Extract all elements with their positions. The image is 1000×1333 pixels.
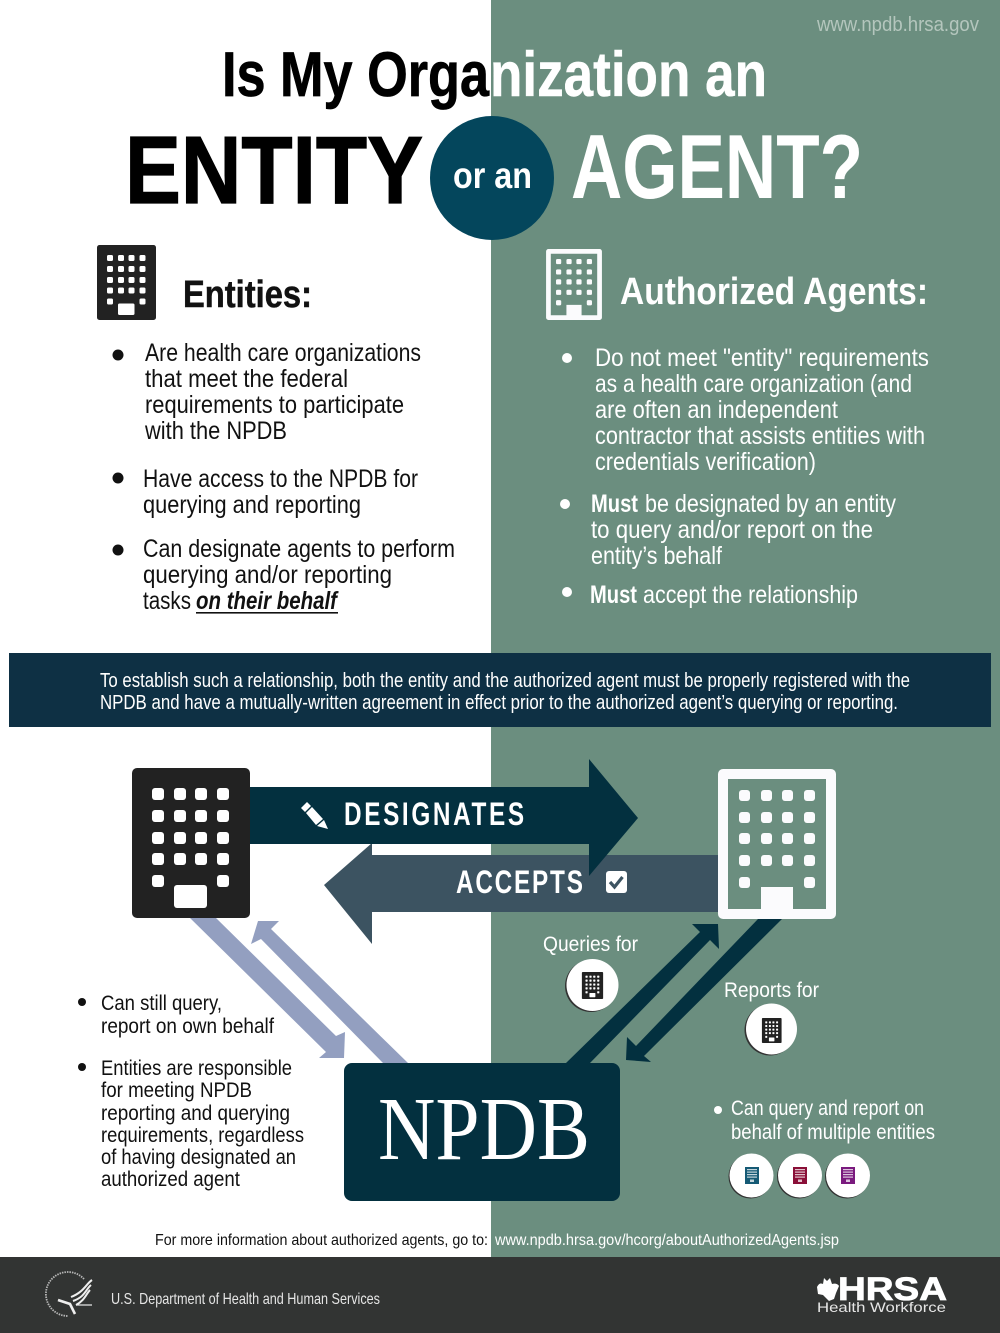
title: [222, 40, 767, 110]
arrow: NPDB to entity: [251, 921, 408, 1063]
arrow: agent reports to NPDB: [626, 919, 782, 1062]
logo: HRSA: [817, 1271, 947, 1315]
link: authorized agents url: www.npdb.hrsa.gov/hcorg/aboutAuthorizedAgents.jsp: [494, 1232, 839, 1249]
arrow: agent queries NPDB: [566, 924, 719, 1063]
panel: entities bullet list: querying and reporting: [143, 491, 361, 519]
panel: entities bullet list: with the NPDB: [144, 417, 287, 445]
arrow: accepts: ACCEPTS: [456, 865, 583, 901]
panel: agents bullet list: contractor that assists entities with: [595, 422, 925, 450]
banner: relationship note: [9, 653, 991, 727]
text: entity notes: requirements, regardless: [101, 1124, 304, 1147]
arrow: entity to NPDB: [190, 918, 345, 1058]
text: entity notes: for meeting NPDB: [101, 1079, 252, 1102]
badge: or an: or an: [453, 155, 532, 196]
label: queries for: Queries for: [543, 933, 638, 956]
panel: agents bullet list: Must: [591, 490, 639, 518]
text: agent note: [714, 1097, 935, 1144]
panel: agents bullet list: Do not meet "entity" requirements: [595, 344, 929, 372]
panel: entities bullet list: tasks: [143, 587, 191, 615]
icon: checkbox: [606, 871, 627, 893]
footer bar: [0, 1257, 1000, 1333]
panel: agents bullet list: be designated by an entity: [645, 490, 896, 518]
panel: entities bullet list: requirements to participate: [145, 391, 404, 419]
text: entity notes: of having designated an: [101, 1146, 296, 1169]
icon: queries entity circle: [565, 959, 618, 1012]
title: Is My Orga: [222, 40, 490, 110]
icon: pencil: [301, 802, 328, 829]
arrow: accepts: [324, 843, 718, 944]
text: entity notes: authorized agent: [101, 1168, 240, 1191]
icon: entity building: [97, 245, 156, 320]
panel: entities bullet list: on their behalf: [196, 587, 339, 615]
heading: entity: ENTITY: [125, 117, 423, 224]
panel: entities bullet list: Have access to the NPDB for: [143, 465, 418, 493]
heading: Authorized Agents: Authorized Agents:: [620, 271, 928, 313]
panel: entities bullet list: [112, 339, 455, 615]
box: NPDB: NPDB: [378, 1080, 590, 1179]
panel: agents bullet list: Must: [590, 581, 638, 609]
text: agent note: Can query and report on: [731, 1097, 924, 1120]
panel: agents bullet list: entity’s behalf: [591, 542, 722, 570]
badge: or an: [430, 116, 554, 240]
text: entity notes: Can still query,: [101, 992, 222, 1015]
logo: HRSA: HRSA: [838, 1271, 947, 1307]
icon: entity building large: [132, 768, 250, 918]
logo: HHS: [46, 1272, 92, 1316]
panel: agents bullet list: [560, 344, 929, 609]
panel: agents bullet list: accept the relationship: [643, 581, 858, 609]
text: agent note: behalf of multiple entities: [731, 1121, 935, 1144]
website url: www.npdb.hrsa.gov: [816, 14, 979, 36]
panel: agents bullet list: to query and/or report on the: [591, 516, 873, 544]
panel: entities bullet list: Can designate agents to perform: [143, 535, 455, 563]
panel: agents bullet list: credentials verification): [595, 448, 816, 476]
title: nization an: [490, 40, 767, 110]
panel: agents bullet list: are often an independent: [595, 396, 838, 424]
background: green right half: [491, 0, 1000, 1257]
box: NPDB: [344, 1063, 620, 1201]
text: entity notes: reporting and querying: [101, 1102, 290, 1125]
label: reports for: Reports for: [724, 979, 819, 1002]
arrow: designates: [250, 759, 638, 876]
panel: agents bullet list: as a health care organization (and: [595, 370, 912, 398]
text: more information: For more information about authorized agents, go to:: [155, 1232, 488, 1249]
icon: agent building: [546, 249, 602, 320]
arrow: designates: DESIGNATES: [344, 797, 524, 833]
text: entity notes: Entities are responsible: [101, 1057, 292, 1080]
text: entity notes: report on own behalf: [101, 1015, 274, 1038]
panel: entities bullet list: Are health care organizations: [145, 339, 421, 367]
icons: multiple entities: [728, 1154, 870, 1198]
footer: department name: U.S. Department of Health and Human Services: [111, 1291, 380, 1308]
panel: entities bullet list: that meet the federal: [145, 365, 348, 393]
text: entity notes: [78, 992, 304, 1191]
panel: entities bullet list: querying and/or reporting: [143, 561, 392, 589]
icon: reports entity circle: [744, 1004, 797, 1056]
heading: Entities: Entities:: [183, 274, 312, 316]
logo: HRSA: Health Workforce: [817, 1299, 946, 1315]
heading: agent: AGENT?: [571, 117, 863, 218]
icon: agent building large: [718, 769, 836, 919]
